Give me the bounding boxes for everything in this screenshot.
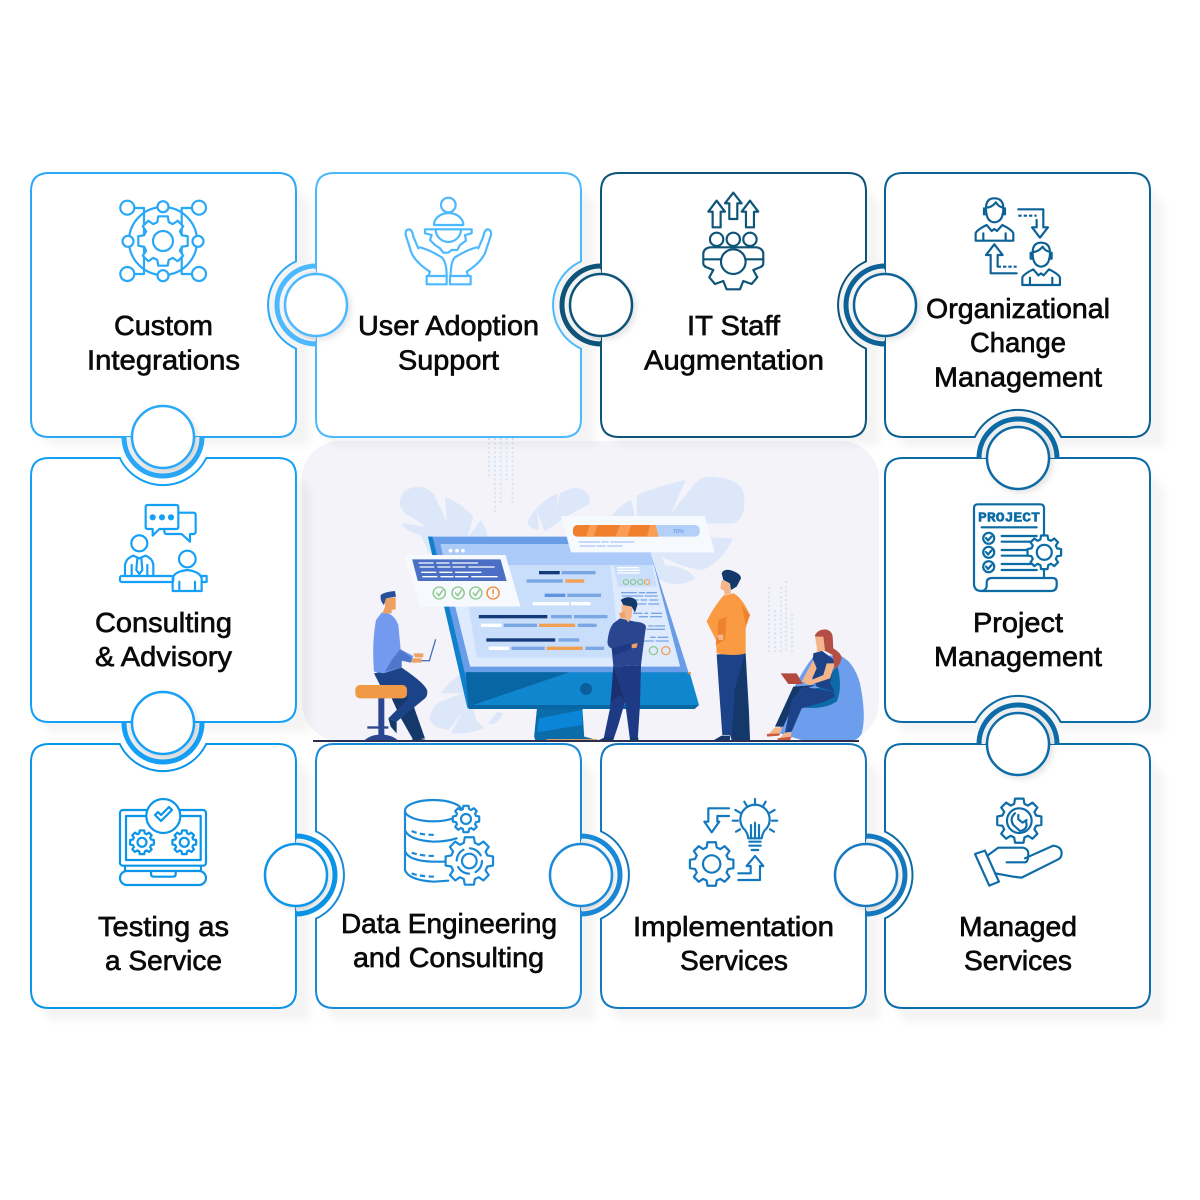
dotted decoration top — [489, 439, 513, 512]
background leaves — [400, 477, 744, 734]
label — [644, 310, 824, 376]
label: Augmentation — [644, 344, 824, 376]
panel: Consulting and Advisory — [31, 458, 296, 722]
label — [358, 310, 539, 376]
panel: Implementation Services — [601, 744, 866, 1008]
label: & Advisory — [95, 641, 232, 672]
label: Consulting — [95, 607, 232, 638]
icon: hands holding gear and person — [406, 198, 491, 284]
icon: project document with gear — [974, 504, 1061, 591]
monitor stand — [534, 707, 597, 741]
connector: Custom Integrations to User Adoption — [277, 266, 347, 344]
panel: Managed Services — [885, 744, 1150, 1008]
connector: Custom Integrations to Consulting — [124, 406, 202, 476]
label: User Adoption — [358, 310, 539, 341]
connector: Implementation to Managed — [835, 836, 905, 914]
label: a Service — [105, 945, 222, 976]
connector: User Adoption to IT Staff — [562, 266, 632, 344]
screen content bars — [479, 568, 670, 655]
panel: Data Engineering and Consulting — [316, 744, 581, 1008]
label — [98, 911, 229, 976]
icon: gear network — [120, 201, 206, 281]
label: Managed — [959, 911, 1077, 942]
label: Services — [964, 945, 1072, 976]
person: woman on beanbag with laptop — [767, 629, 864, 741]
label — [959, 911, 1077, 976]
panel: User Adoption Support — [316, 173, 581, 437]
floating checklist card — [405, 555, 521, 607]
icon: laptop with gears and check — [120, 799, 206, 885]
label: Services — [680, 945, 788, 976]
icon: gear, idea bulb and arrows — [690, 799, 777, 886]
label: Integrations — [87, 344, 240, 376]
panel: Testing as a Service — [31, 744, 296, 1008]
label — [95, 607, 232, 672]
person: man in dark blue thinking — [597, 597, 646, 741]
label — [633, 911, 834, 976]
connector: Consulting to Testing — [124, 692, 202, 762]
label: Custom — [114, 310, 213, 341]
icon: team and upward arrows — [703, 193, 763, 289]
progress label: 70% — [673, 529, 684, 535]
icon: people exchanging roles — [976, 198, 1060, 285]
label: and Consulting — [353, 942, 544, 973]
label — [341, 908, 557, 973]
label: Support — [398, 344, 499, 376]
panel: Custom Integrations — [31, 173, 296, 437]
icon: consultation with speech bubbles — [120, 505, 207, 591]
label: Change — [970, 327, 1066, 358]
connector: Organizational Change to Project — [979, 419, 1057, 489]
dotted decoration right — [769, 582, 792, 653]
panel: Organizational Change Management — [885, 173, 1150, 437]
label: Project — [973, 607, 1063, 638]
ground line — [313, 740, 859, 742]
connector: IT Staff to Organizational Change — [846, 266, 916, 344]
label: IT Staff — [687, 310, 780, 341]
floating progress card — [561, 516, 715, 552]
label: Testing as — [98, 911, 229, 942]
panel: central illustration — [302, 439, 879, 742]
label: Organizational — [926, 293, 1110, 324]
icon: hand holding gear and wrench — [975, 799, 1062, 886]
label — [934, 607, 1102, 672]
label: Data Engineering — [341, 908, 557, 939]
person: man in orange shirt — [707, 570, 750, 741]
illustration scene — [400, 477, 744, 741]
label — [926, 293, 1110, 392]
person: man on stool — [355, 591, 436, 741]
icon: database with gears — [405, 800, 493, 885]
label: Management — [934, 641, 1102, 672]
connector: Testing to Data Engineering — [265, 836, 335, 914]
connector: Data Engineering to Implementation — [550, 836, 620, 914]
connector: Project to Managed — [979, 705, 1057, 775]
label: Management — [934, 362, 1102, 392]
panel: IT Staff Augmentation — [601, 173, 866, 437]
label — [87, 310, 240, 376]
panel: Project Management — [885, 458, 1150, 722]
label: Implementation — [633, 911, 834, 942]
monitor — [428, 537, 699, 709]
icon: project document with gear: PROJECT — [978, 510, 1040, 526]
